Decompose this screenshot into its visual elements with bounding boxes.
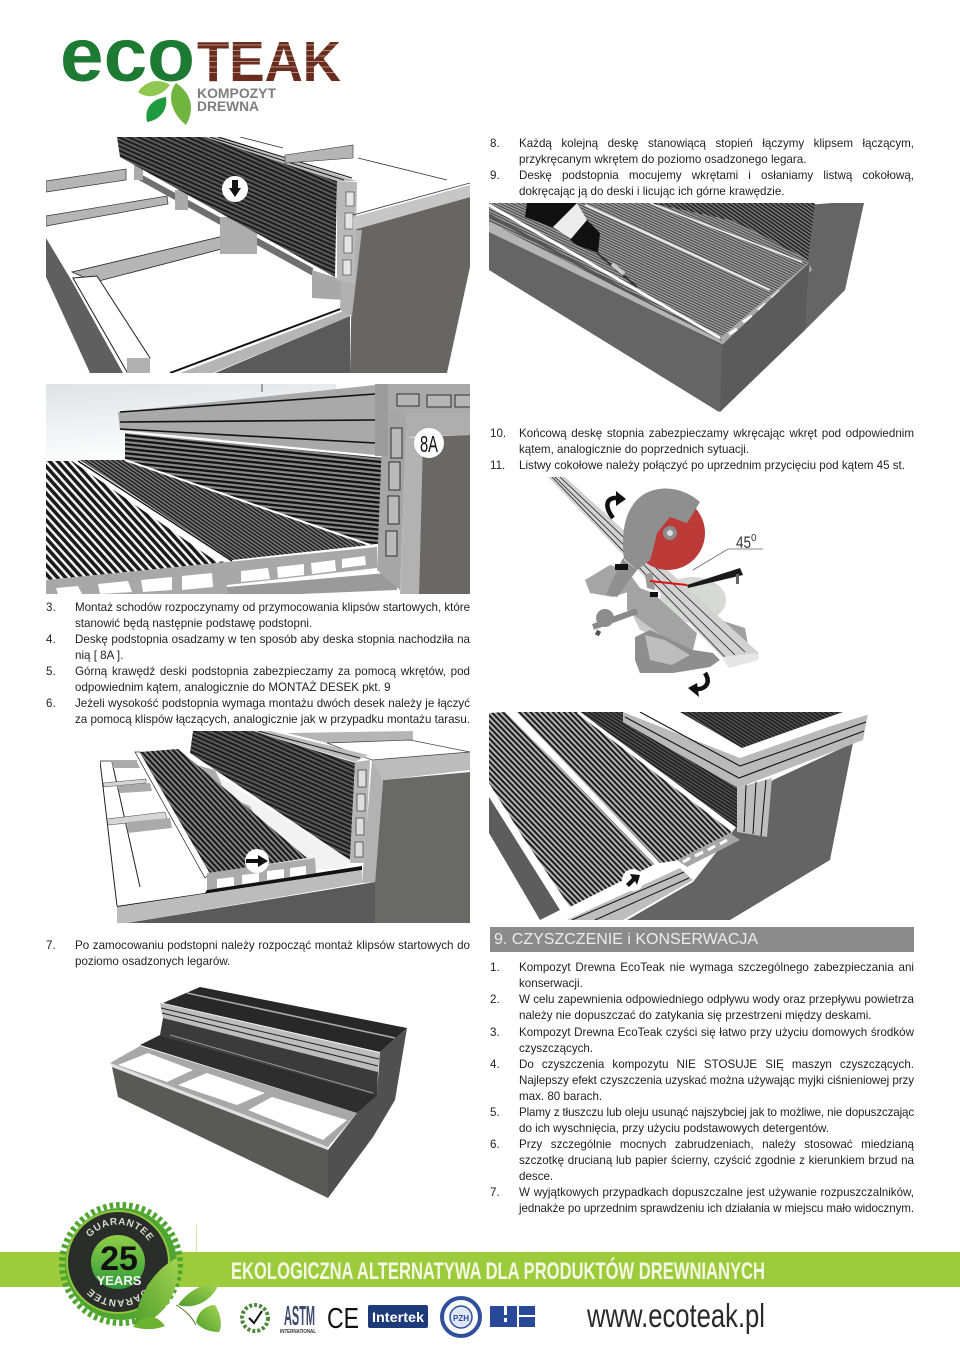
text block: steps 8-9: Każdą kolejną deskę stanowiącą stopień łączymy klipsem łączącym, bbox=[519, 137, 914, 150]
badge: curved text bbox=[86, 1218, 154, 1307]
text block: step 7: poziomo osadzonych legarów. bbox=[75, 955, 230, 968]
text block: steps 3-6: za pomocą klispów łączących, analogicznie jak w przypadku montażu tarasu. bbox=[75, 713, 470, 726]
text block: steps 3-6: 4. bbox=[46, 633, 56, 646]
logo subtitle: KOMPOZYT bbox=[197, 86, 277, 101]
label: 8A: 8A bbox=[420, 431, 438, 457]
arrow: upper rotation bbox=[607, 491, 626, 518]
certificate: ASTM International: INTERNATIONAL bbox=[280, 1329, 316, 1335]
illustration: first tread board on frame bbox=[100, 731, 470, 923]
text block: steps 10-11: Końcową deskę stopnia zabezpieczamy wkręcając wkręt pod odpowiednim bbox=[519, 427, 914, 440]
illustration: miter saw cutting at 45 degrees bbox=[548, 477, 763, 697]
illustration: completed stairs bbox=[110, 987, 407, 1198]
text block: section 9 list: Kompozyt Drewna EcoTeak nie wymaga szczególnego zabezpieczania ani bbox=[519, 961, 914, 974]
text block: section 9 list: 7. bbox=[490, 1186, 500, 1199]
text block: section 9 list: szczotkę drucianą lub papier ścierny, czyścić zgodnie z kierunkiem brzud na bbox=[519, 1154, 914, 1167]
text block: section 9 list: konserwacji. bbox=[519, 977, 583, 990]
logo: ecoTEAK Kompozyt Drewna: DREWNA bbox=[197, 99, 259, 114]
text block: steps 8-9: 8. bbox=[490, 137, 500, 150]
text block: section 9 list: max. 80 barach. bbox=[519, 1090, 602, 1103]
saw hub bbox=[663, 526, 677, 540]
certificate: CE: CE bbox=[327, 1303, 359, 1335]
badge: 25 years guarantee: YEARS bbox=[97, 1273, 142, 1288]
text block: steps 3-6 bbox=[46, 601, 470, 726]
website URL: www.ecoteak.pl bbox=[586, 1297, 765, 1334]
angle label: 45 degrees: 45 bbox=[736, 533, 751, 552]
badge: leaves bbox=[133, 1258, 221, 1332]
certificate: PZH bbox=[442, 1298, 480, 1336]
text block: section 9 list: Plamy z tłuszczu lub oleju usunąć najszybciej jak to możliwe, nie dopuszczając bbox=[519, 1106, 914, 1119]
text block: section 9 list: jednakże po uprzednim sprawdzeniu ich działania w miejscu mało widocznym. bbox=[519, 1202, 914, 1215]
text block: steps 10-11 bbox=[490, 427, 914, 472]
text block: section 9 list: 5. bbox=[490, 1106, 500, 1119]
text block: steps 3-6: 6. bbox=[46, 697, 56, 710]
text block: section 9 list: 6. bbox=[490, 1138, 500, 1151]
text block: steps 8-9: dokręcając ją do deski i licując ich górne krawędzie. bbox=[519, 185, 785, 198]
text block: section 9 list: Przy szczególnie mocnych zabrudzeniach, należy stosować miedzianą bbox=[519, 1138, 914, 1151]
text block: steps 3-6: 5. bbox=[46, 665, 56, 678]
text block: section 9 list bbox=[490, 961, 914, 1215]
text block: steps 3-6: Górną krawędź deski podstopnia zabezpieczamy za pomocą wkrętów, pod bbox=[75, 665, 470, 678]
illustration: riser board placed on step frame bbox=[46, 137, 470, 373]
badge: 25 years guarantee: 25 bbox=[100, 1240, 138, 1278]
icon: right arrow bbox=[245, 849, 269, 873]
text block: steps 10-11: 11. bbox=[490, 459, 505, 472]
arrow: lower rotation bbox=[688, 673, 708, 697]
green footer band bbox=[0, 1252, 960, 1287]
text block: steps 8-9: przykręcanym wkrętem do poziomo osadzonego legara. bbox=[519, 153, 806, 166]
text block: section 9 list: W celu zapewnienia odpowiedniego odpływu wody oraz przepływu powietrza bbox=[519, 993, 914, 1006]
heading: section 9: 9. CZYSZCZENIE i KONSERWACJA bbox=[494, 931, 758, 948]
text block: step 7: 7. bbox=[46, 939, 56, 952]
text block: section 9 list: desce. bbox=[519, 1170, 553, 1183]
saw guard and arm bbox=[606, 488, 700, 597]
text block: section 9 list: należy nie dopuszczać do zatykania się przestrzeni między deskami. bbox=[519, 1009, 872, 1022]
angle label: 45 degrees bbox=[693, 533, 763, 570]
text block: steps 10-11: 10. bbox=[490, 427, 506, 440]
text block: section 9 list: 1. bbox=[490, 961, 500, 974]
text block: section 9 list: czyszczących. bbox=[519, 1042, 593, 1055]
icon: diagonal arrow bbox=[622, 869, 644, 891]
certificate: Intertek: Intertek bbox=[372, 1309, 424, 1325]
icon: drill bbox=[525, 203, 637, 287]
illustration: screwing down riser cover bbox=[489, 203, 864, 412]
text block: section 9 list: 4. bbox=[490, 1058, 500, 1071]
text block: steps 3-6: stanowić będą następnie podstawę podstopni. bbox=[75, 617, 312, 630]
text block: steps 3-6: Montaż schodów rozpoczynamy od przymocowania klipsów startowych, które bbox=[75, 601, 470, 614]
text block: section 9 list: W wyjątkowych przypadkach dopuszczalne jest używanie rozpuszczalników, bbox=[519, 1186, 914, 1199]
text block: steps 10-11: kątem, analogicznie do poprzednich sytuacji. bbox=[519, 443, 749, 456]
logo wordmark: eco: eco bbox=[60, 13, 195, 98]
text block: steps 3-6: Jeżeli wysokość podstopnia wymaga montażu dwóch desek należy je łączyć bbox=[75, 697, 470, 710]
text block: steps 10-11: Listwy cokołowe należy połączyć po uprzednim przycięciu pod kątem 45 st. bbox=[519, 459, 905, 472]
logo leaves bbox=[138, 81, 191, 125]
text block: step 7: Po zamocowaniu podstopni należy rozpocząć montaż klipsów startowych do bbox=[75, 939, 470, 952]
certificate: laurel check bbox=[242, 1305, 268, 1331]
text: ASTM bbox=[284, 1300, 315, 1331]
text block: section 9 list: Do czyszczenia kompozytu NIE STOSUJE SIĘ maszyn czyszczących. bbox=[519, 1058, 914, 1071]
label: 8A bbox=[414, 428, 444, 458]
text block: section 9 list: 2. bbox=[490, 993, 500, 1006]
angle label: 45 degrees: 0 bbox=[751, 533, 757, 544]
text block: steps 8-9: Deskę podstopnia mocujemy wkrętami i osłaniamy listwą cokołową, bbox=[519, 169, 914, 182]
text block: steps 8-9: 9. bbox=[490, 169, 500, 182]
logo: ecoTEAK Kompozyt Drewna bbox=[60, 13, 342, 125]
certificate: Intertek bbox=[368, 1305, 428, 1328]
text block: steps 3-6: Deskę podstopnia osadzamy w ten sposób aby deska stopnia nachodziła na bbox=[75, 633, 470, 646]
icon: down arrow bbox=[222, 176, 248, 202]
certificate: ASTM International bbox=[280, 1300, 316, 1335]
illustration: 8A riser and deck detail bbox=[46, 384, 471, 594]
text block: section 9 list: 3. bbox=[490, 1026, 500, 1039]
text block: steps 3-6: nią [ 8A ]. bbox=[75, 649, 123, 662]
certificate: PZH: PZH bbox=[453, 1314, 469, 1323]
logo wordmark: TEAK: TEAK bbox=[197, 30, 341, 94]
text block: steps 3-6: 3. bbox=[46, 601, 56, 614]
text block: step 7 bbox=[46, 939, 470, 968]
text block: section 9 list: Najlepszy efekt czyszczenia uzyskać można używając myjki ciśnieniowej przy bbox=[519, 1074, 914, 1087]
text block: steps 8-9 bbox=[490, 137, 914, 198]
text block: section 9 list: do ich wyschnięcia, przy użyciu podstawowych detergentów. bbox=[519, 1122, 829, 1135]
saw blade bbox=[631, 496, 705, 570]
badge: curved text: GUARANTEE bbox=[86, 1218, 154, 1241]
heading: section 9 bbox=[490, 927, 914, 952]
text block: section 9 list: Kompozyt Drewna EcoTeak czyści się łatwo przy użyciu domowych środków bbox=[519, 1026, 914, 1039]
badge: 25 years guarantee bbox=[59, 1202, 221, 1332]
badge: curved text: GUARANTEE bbox=[86, 1284, 149, 1307]
certificate: ITB bbox=[490, 1306, 535, 1327]
illustration: closing tread with riser cover bbox=[489, 712, 870, 920]
text block: steps 3-6: odpowiednim kątem, analogicznie do MONTAŻ DESEK pkt. 9 bbox=[75, 681, 391, 694]
